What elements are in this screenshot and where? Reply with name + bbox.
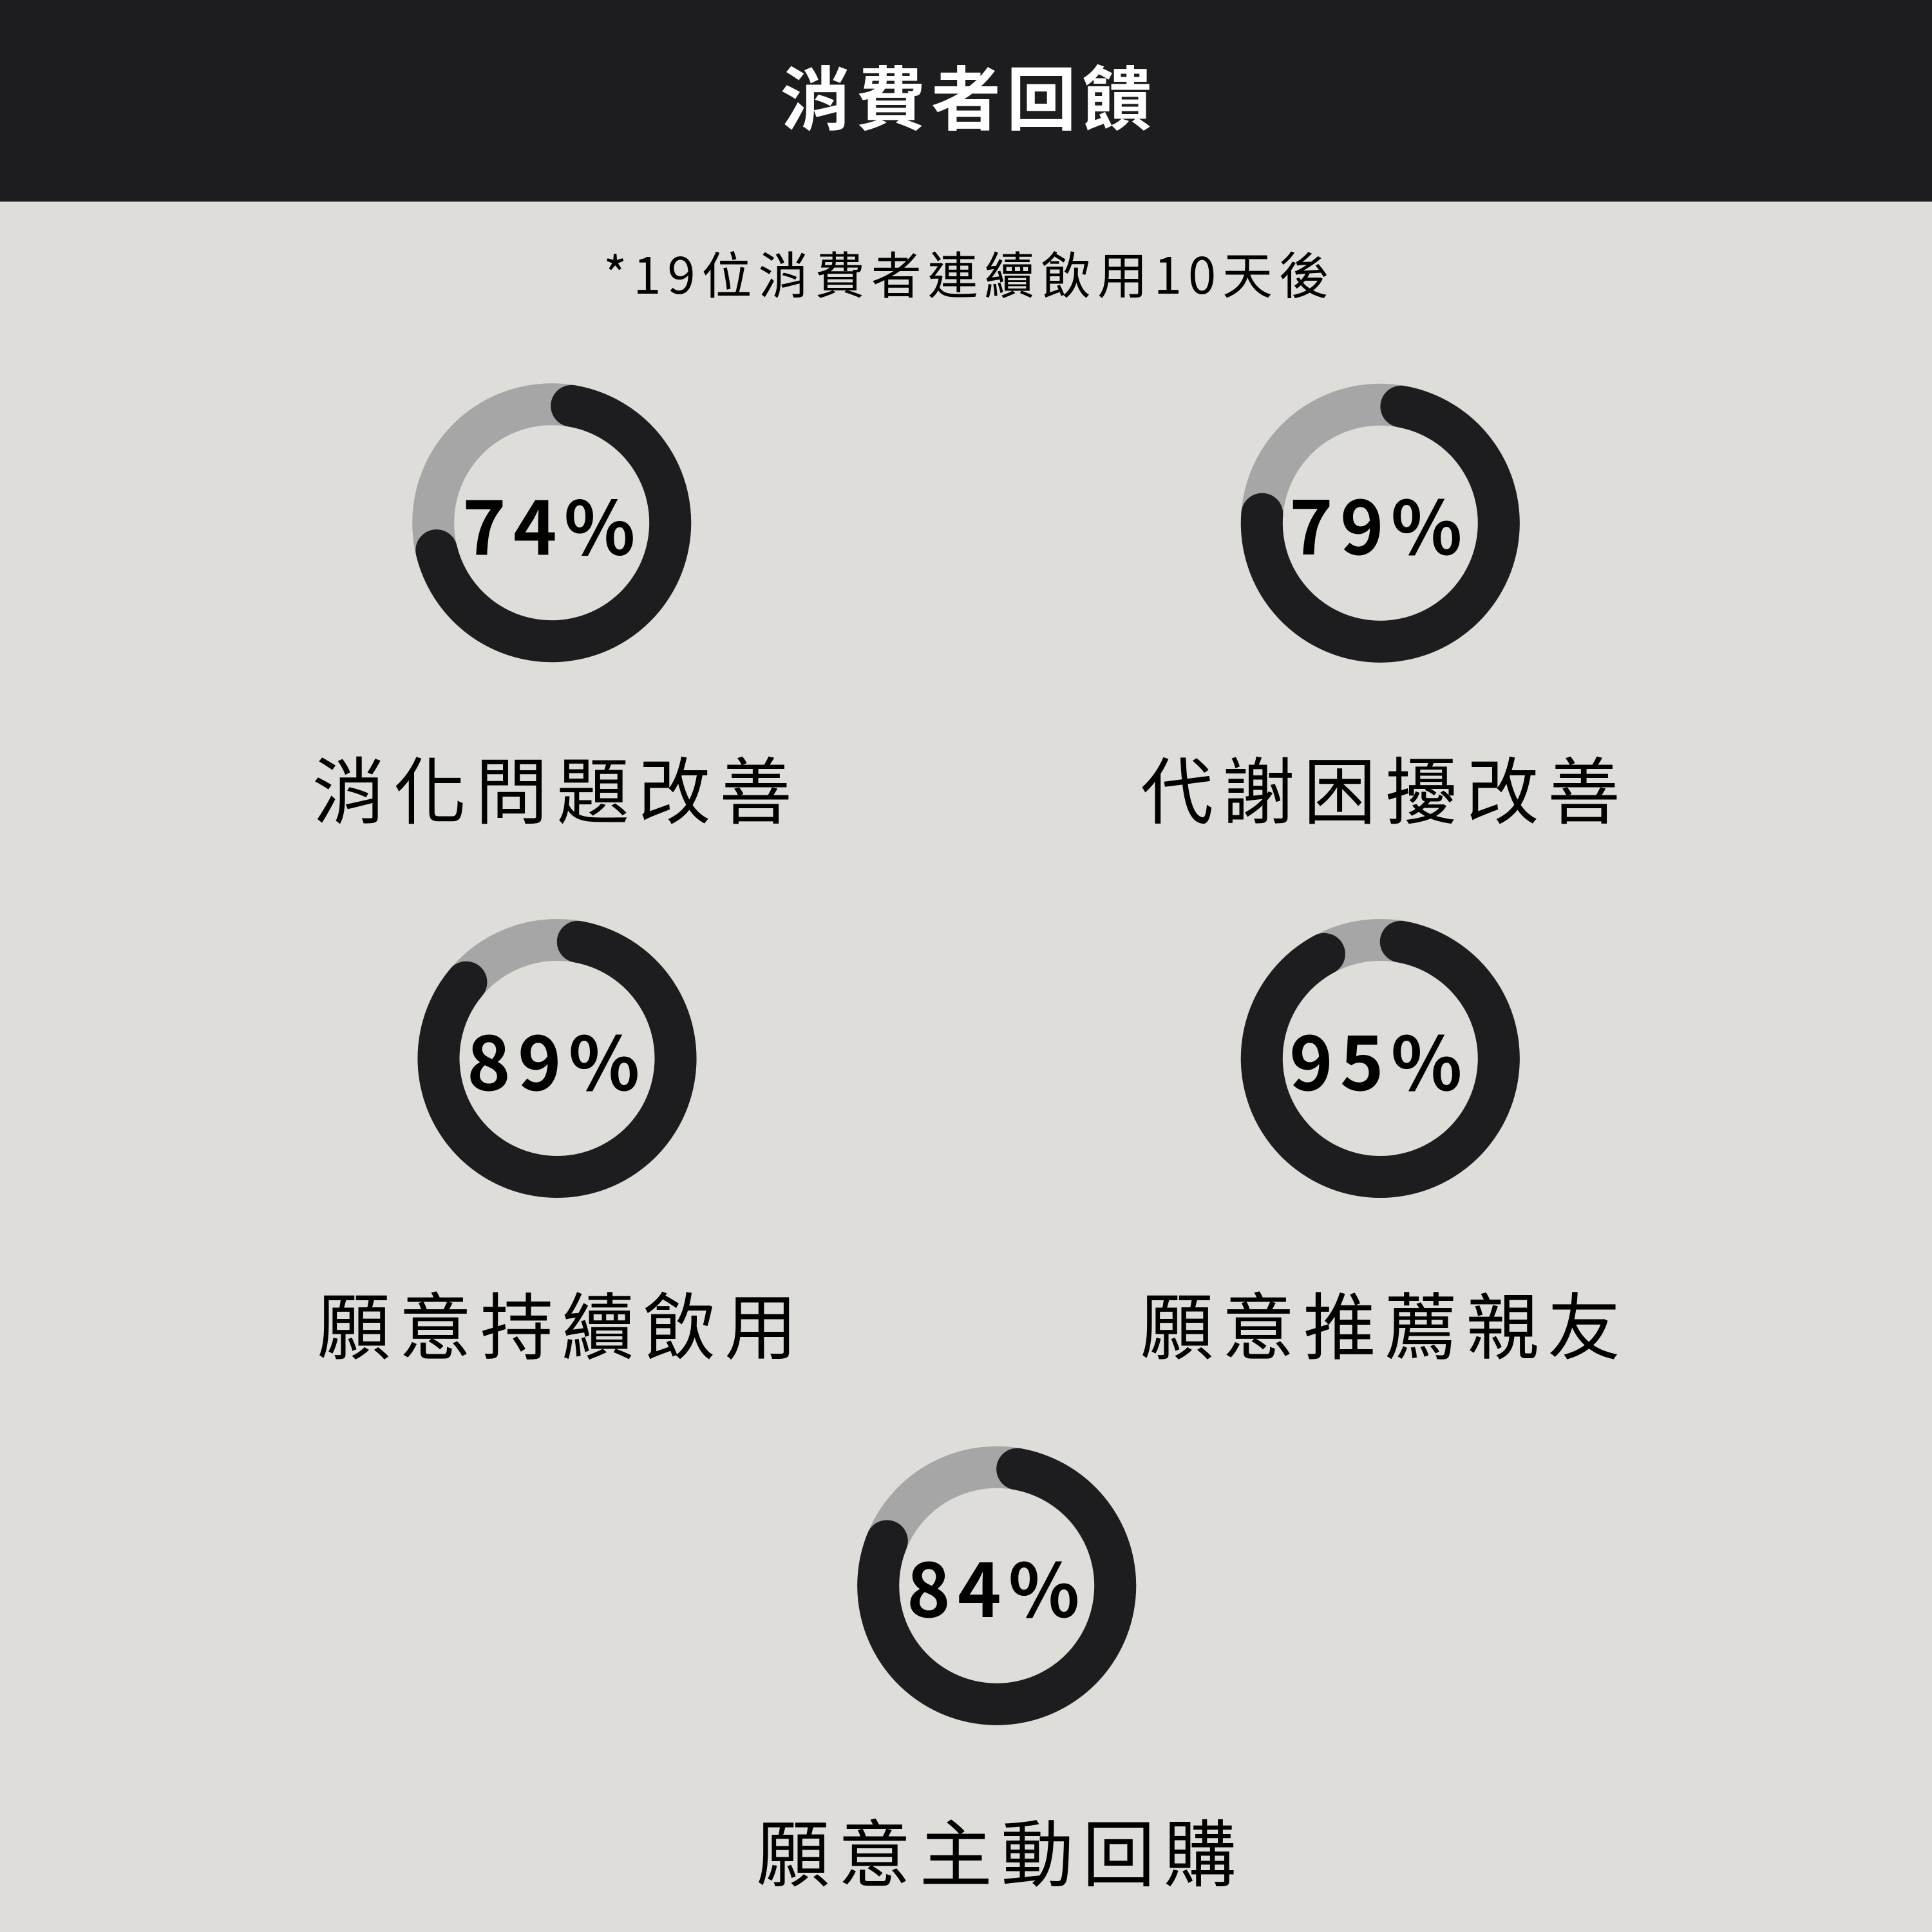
donut chart 74% (415, 386, 688, 659)
panel: digestion improvement 74% (312, 386, 800, 839)
value 89%: 89% (467, 1005, 647, 1112)
label: 願意推薦親友 (1141, 1269, 1629, 1374)
value 79%: 79% (1289, 469, 1469, 576)
donut chart 79% (1243, 386, 1518, 661)
subtitle note: *19位消費者連續飲用10天後 (603, 236, 1336, 308)
panel: willing to keep drinking 89% (317, 921, 806, 1374)
panel: willing to recommend 95% (1141, 921, 1629, 1374)
value 84%: 84% (907, 1532, 1086, 1639)
label: 願意持續飲用 (317, 1269, 806, 1374)
donut chart 89% (420, 921, 694, 1196)
label: 願意主動回購 (757, 1796, 1245, 1902)
label: 代謝困擾改善 (1141, 734, 1629, 839)
label: 消化問題改善 (312, 734, 800, 839)
title: 消費者回饋 (781, 44, 1157, 145)
panel: metabolism improvement 79% (1141, 386, 1629, 839)
panel: willing to repurchase 84% (757, 1448, 1245, 1902)
donut chart 95% (1243, 921, 1517, 1196)
value 74%: 74% (462, 470, 642, 577)
donut chart 84% (860, 1448, 1134, 1723)
value 95%: 95% (1289, 1005, 1469, 1112)
header band with title (0, 0, 1932, 202)
